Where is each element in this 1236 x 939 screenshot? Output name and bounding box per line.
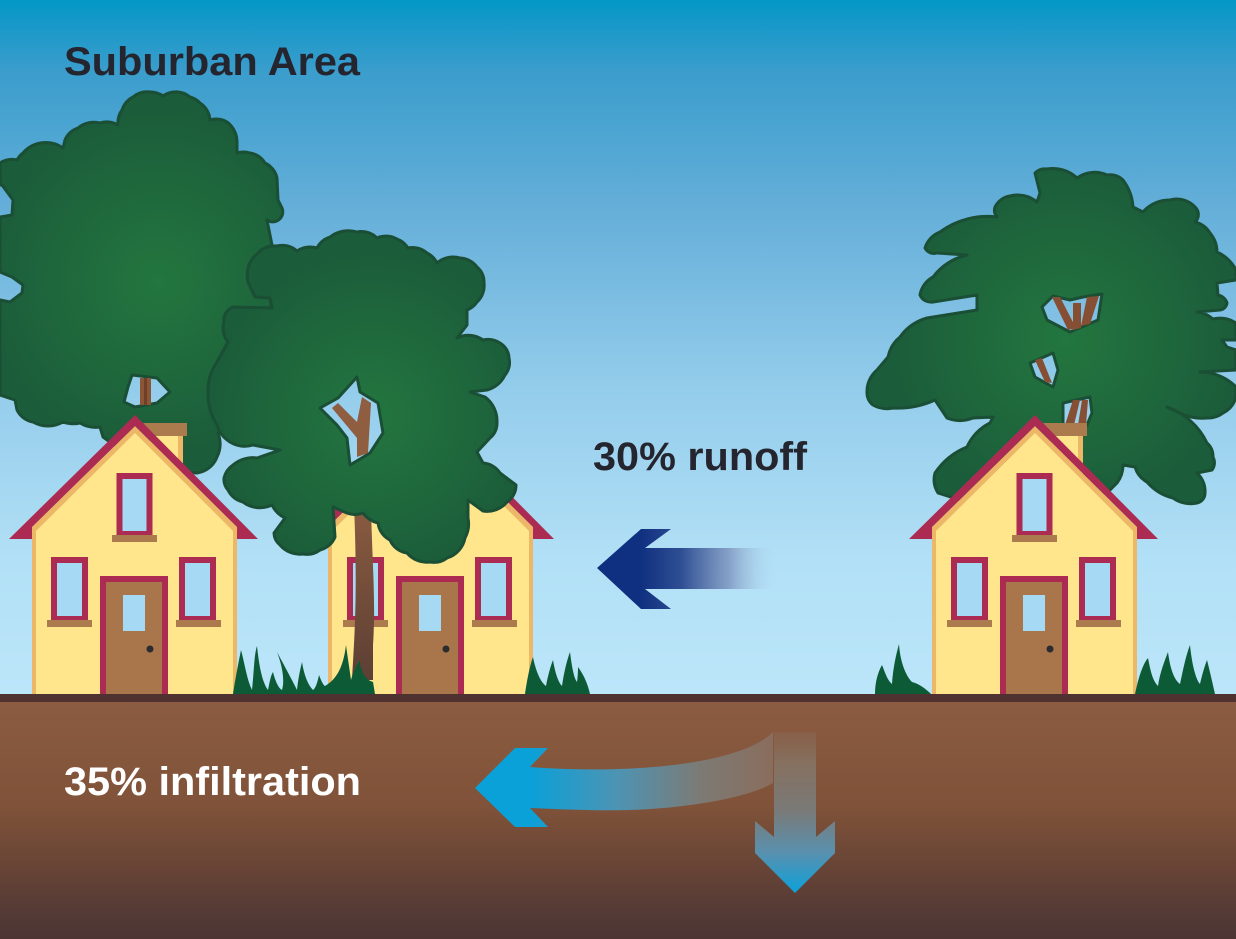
ground	[0, 694, 1236, 939]
grass: right house left	[875, 644, 931, 694]
grass: left cluster	[233, 645, 375, 694]
infiltration arrow: downward	[755, 732, 835, 893]
grass: middle cluster	[525, 652, 590, 694]
runoff arrow	[597, 529, 778, 609]
runoff label: 30% runoff	[593, 435, 808, 479]
house: right	[909, 415, 1158, 694]
tree: right	[867, 168, 1236, 504]
tree gaps with branches	[1030, 294, 1102, 425]
tree gap with branches	[320, 377, 383, 465]
infiltration label: 35% infiltration	[64, 760, 361, 804]
tree: far left	[0, 92, 283, 473]
sky background	[0, 0, 1236, 700]
tree: front middle	[208, 231, 516, 562]
infiltration arrow: sideways	[475, 732, 773, 827]
tree gap with trunk	[124, 375, 170, 407]
title: Suburban Area	[64, 40, 361, 84]
house: left	[9, 415, 258, 694]
trunk: middle tree	[352, 505, 374, 680]
house: middle	[305, 415, 554, 694]
grass: right house right	[1135, 645, 1215, 694]
